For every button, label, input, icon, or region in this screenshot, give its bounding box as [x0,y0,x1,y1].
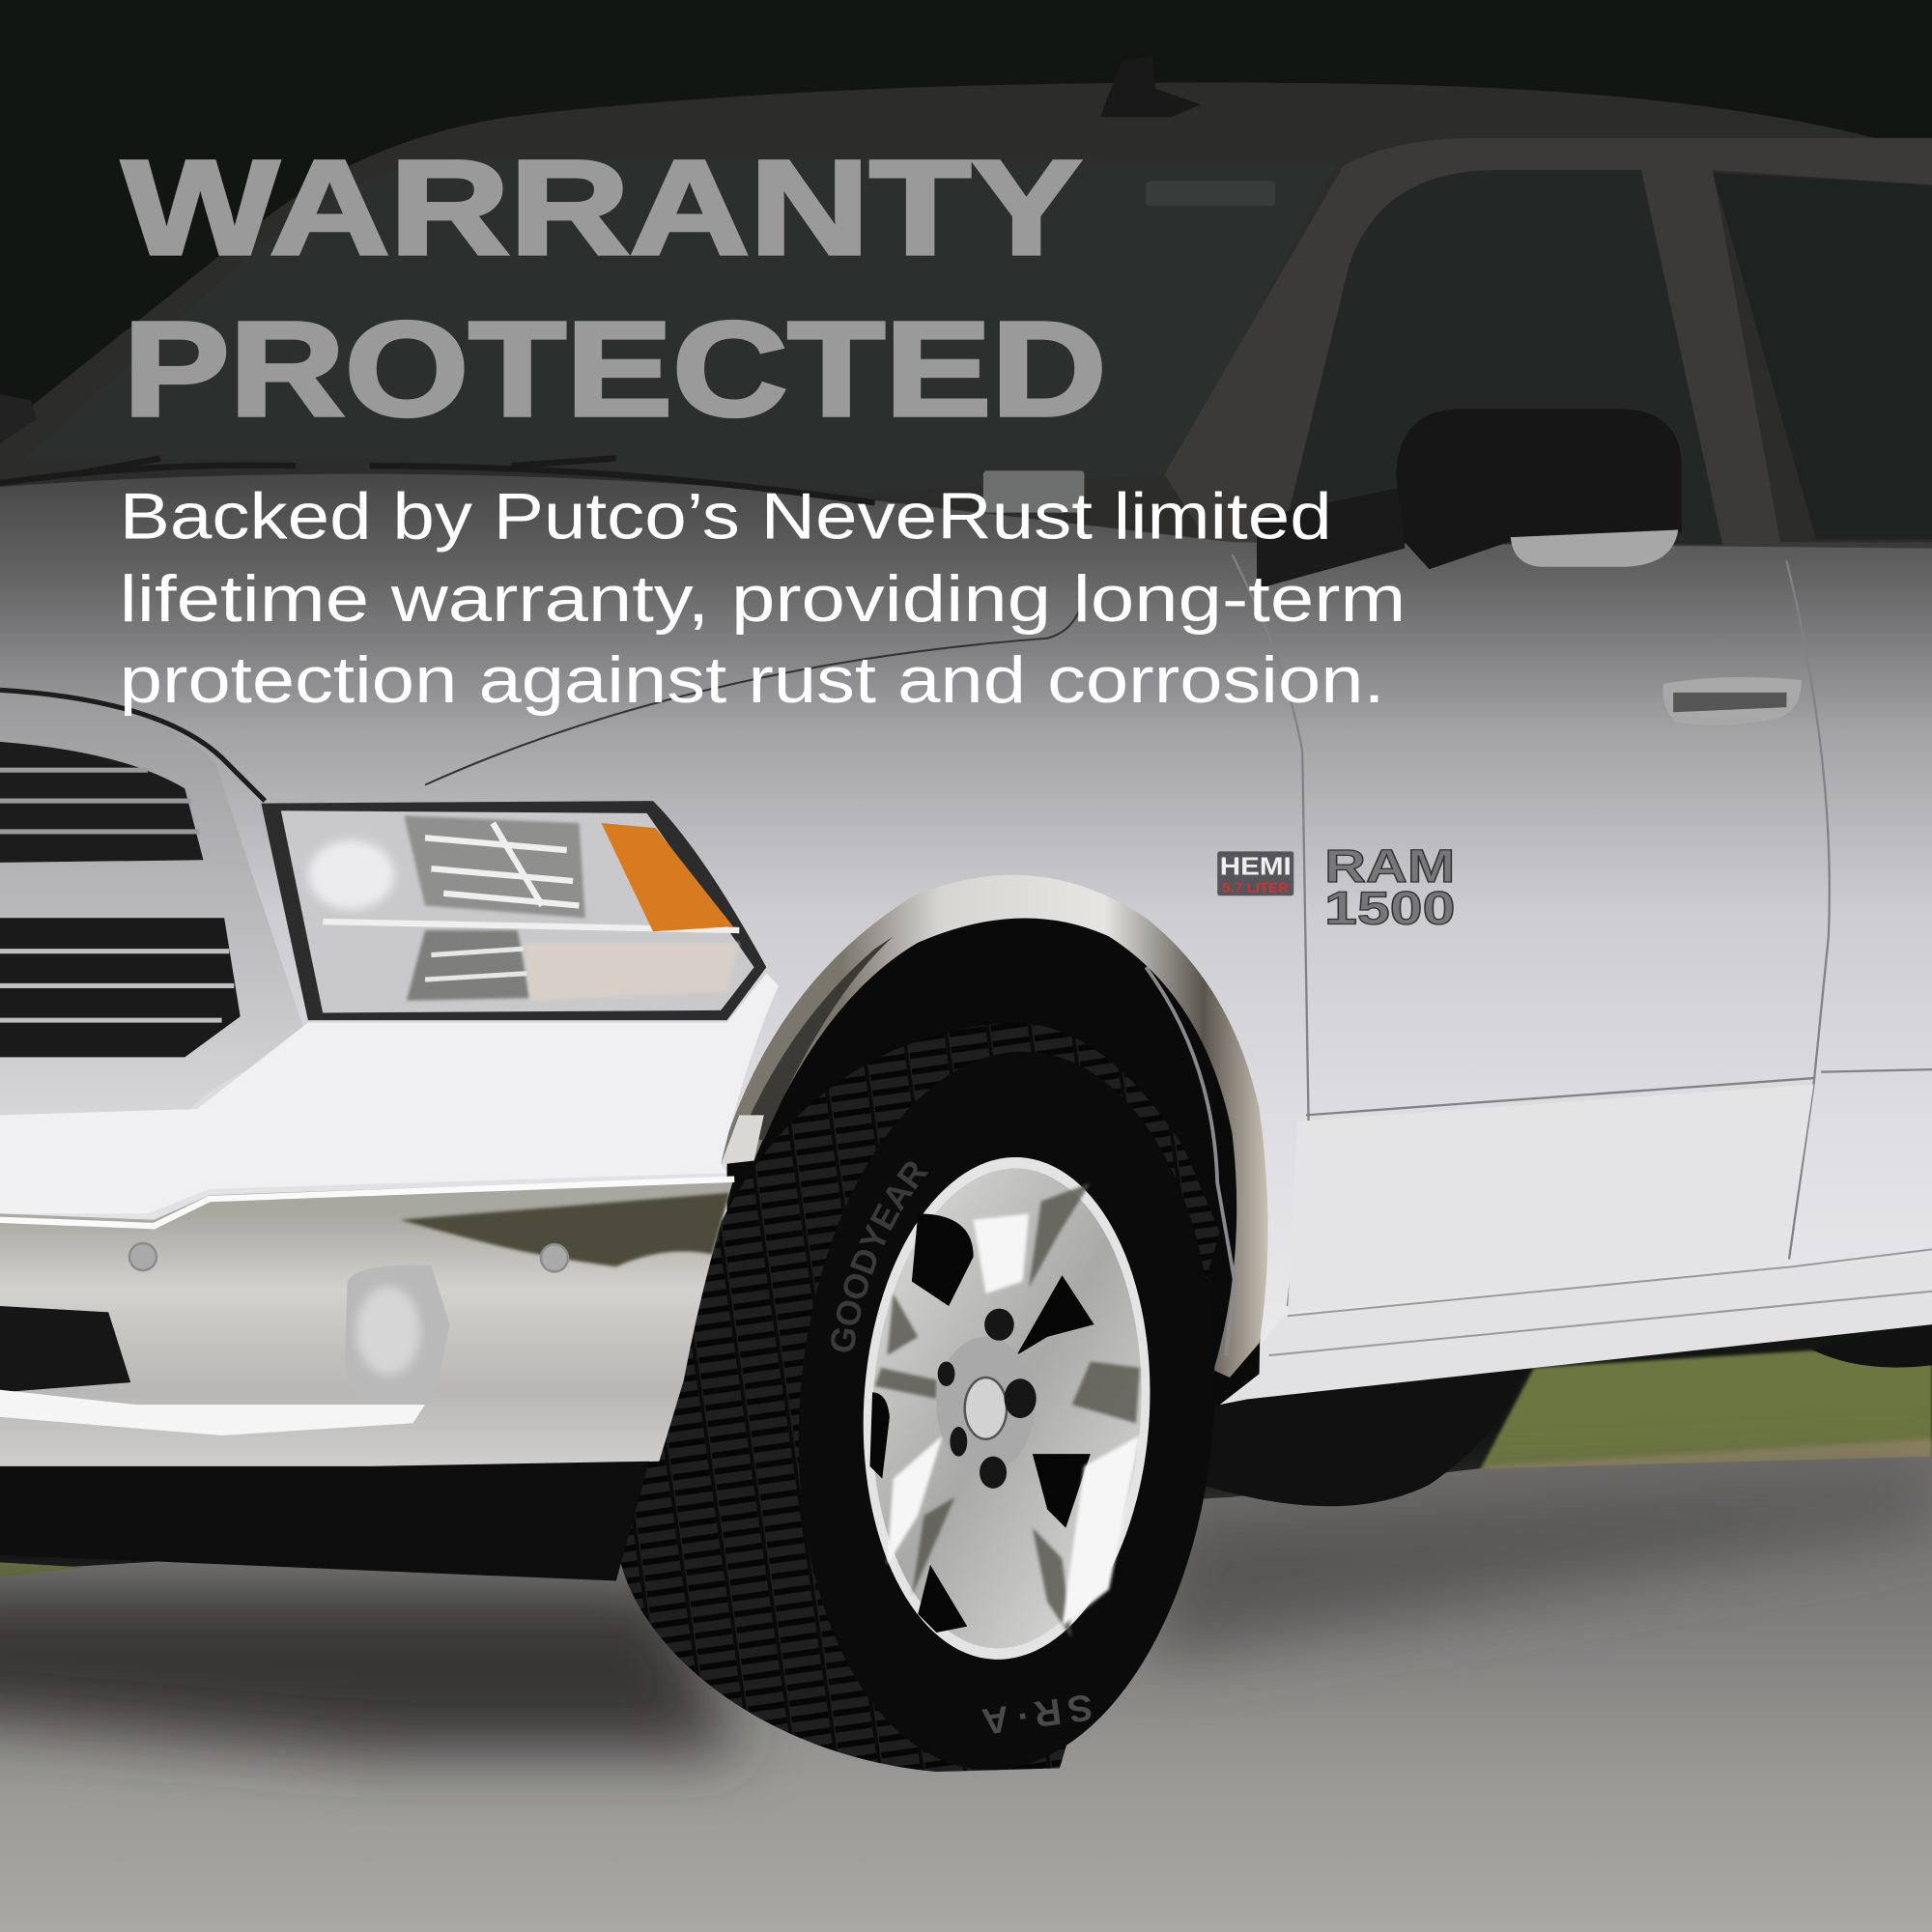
road shadow under truck [0,1472,1932,1749]
bumper top highlight [0,1179,734,1226]
RAM 1500 badge: RAM [1324,840,1455,893]
amber turn signal [601,823,733,931]
rear tyre [1202,1355,1530,1506]
fender flare chrome [719,875,1267,1378]
title: WARRANTY [122,133,1082,283]
underbody right [1811,1319,1932,1368]
background: dark trees [0,0,1932,1479]
sensors [129,1243,568,1271]
background: grass [1479,1343,1932,1474]
door handle [1663,677,1802,725]
upper grille [0,742,203,863]
fog lamp [345,1265,450,1403]
wheel well [727,892,1263,1405]
lower air dam [0,1462,649,1580]
RAM 1500 badge: 1500 [1324,883,1455,935]
tyre lettering: GOODYEAR [831,1161,928,1352]
title [122,133,1106,444]
cab roof [0,83,1932,579]
wheel openings [870,1213,1094,1633]
rocker panel [1220,1249,1932,1403]
body text: Backed by Putco’s NeveRust limited [120,480,1332,553]
engine badge: 5.7 LITER [1222,879,1289,895]
windshield [25,157,1337,493]
engine badge [1217,851,1293,895]
front side window [1282,170,1722,545]
wheel rim [851,1150,1162,1666]
inspection sticker [983,470,1084,513]
title: PROTECTED [124,295,1106,444]
body side [0,474,1932,1405]
upper bumper fascia [0,974,779,1213]
tyre lettering: SR·A [980,1686,1095,1742]
lower door panel [1288,1084,1814,1312]
chrome spoke reflections [875,1182,1140,1638]
tyre lettering [831,1161,1095,1742]
antenna [1100,55,1202,117]
hub centre cap [965,1378,1007,1439]
body text: lifetime warranty, providing long-term [120,563,1406,636]
bright spoke highlights [887,1213,1140,1627]
bumper chrome lip [0,1390,425,1435]
chrome bumper [0,1177,734,1468]
side mirror [1257,409,1682,589]
wipers [0,458,875,502]
front tyre tread [619,1023,1220,1772]
lower grille [0,918,241,1057]
rear side window [1713,173,1932,540]
body text: protection against rust and corrosion. [120,644,1385,717]
body text [120,480,1406,717]
headlight [261,801,766,1020]
inner liner highlight [1146,967,1235,1355]
driver mirror stub [0,394,37,443]
front tyre sidewall [775,1037,1238,1784]
door pillar and frame [1164,138,1932,579]
background: road [0,1457,1932,1932]
door seams [1233,554,1932,1306]
hood panel line [425,579,1084,784]
lower bumper vent [0,1306,130,1392]
bumper reflection [401,1193,729,1266]
RAM 1500 badge [1324,840,1455,935]
lug nuts [938,1309,1037,1489]
windshield sticker [1146,182,1275,206]
engine badge: HEMI [1220,854,1292,881]
grille surround [0,690,308,1115]
